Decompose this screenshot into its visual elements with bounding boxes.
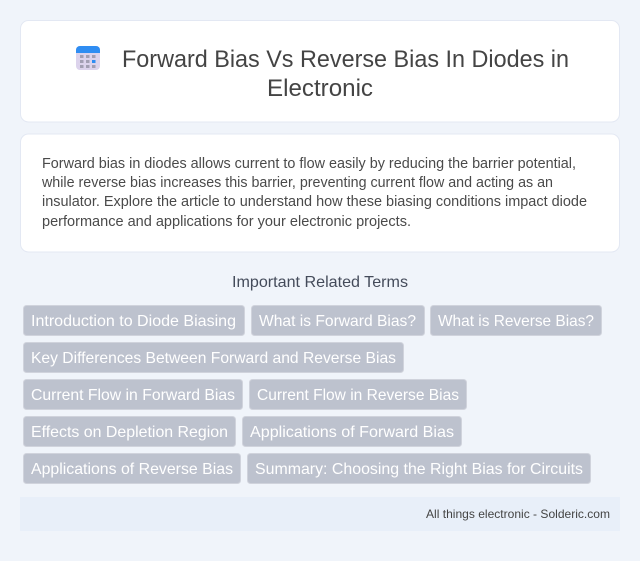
tag: current forward	[24, 380, 242, 410]
footer	[20, 497, 620, 531]
tag: introduction: Introduction to Diode Biasing	[31, 313, 236, 330]
footer: All things electronic - Solderic.com	[426, 507, 610, 521]
title: Electronic	[267, 75, 373, 102]
tag: reverse: What is Reverse Bias?	[438, 313, 594, 330]
summary text: performance and applications for your electronic projects.	[42, 214, 411, 230]
tag: summary	[248, 454, 590, 484]
icon: calendar	[76, 46, 100, 70]
tag: app reverse: Applications of Reverse Bias	[31, 461, 233, 478]
tag: current reverse: Current Flow in Reverse Bias	[257, 387, 459, 404]
tag: current reverse	[250, 380, 466, 410]
tag: introduction	[24, 306, 244, 336]
tag: depletion	[24, 416, 236, 446]
tag: forward: What is Forward Bias?	[259, 313, 416, 330]
heading: important related terms: Important Related Terms	[232, 274, 408, 291]
related term tags	[24, 306, 602, 484]
summary text: while reverse bias increases this barrier, preventing current flow and acting as an	[41, 175, 553, 191]
tag: key differences	[24, 342, 404, 372]
tag: forward	[252, 306, 424, 336]
summary text	[41, 156, 587, 230]
tag: key differences: Key Differences Between Forward and Reverse Bias	[31, 350, 396, 367]
title	[122, 46, 569, 102]
panel: title card	[20, 20, 620, 122]
tag: app reverse	[24, 454, 240, 484]
tag: app forward: Applications of Forward Bias	[250, 424, 454, 441]
panel: summary	[20, 134, 620, 252]
tag: reverse	[430, 306, 602, 336]
tag: app forward	[242, 416, 462, 446]
title: Forward Bias Vs Reverse Bias In Diodes in	[122, 46, 569, 73]
tag: summary: Summary: Choosing the Right Bias for Circuits	[255, 461, 583, 478]
summary text: Forward bias in diodes allows current to flow easily by reducing the barrier potential,	[42, 156, 576, 172]
tag: current forward: Current Flow in Forward Bias	[31, 387, 235, 404]
tag: depletion: Effects on Depletion Region	[31, 424, 228, 441]
summary text: insulator. Explore the article to understand how these biasing conditions impact diode	[42, 194, 587, 210]
